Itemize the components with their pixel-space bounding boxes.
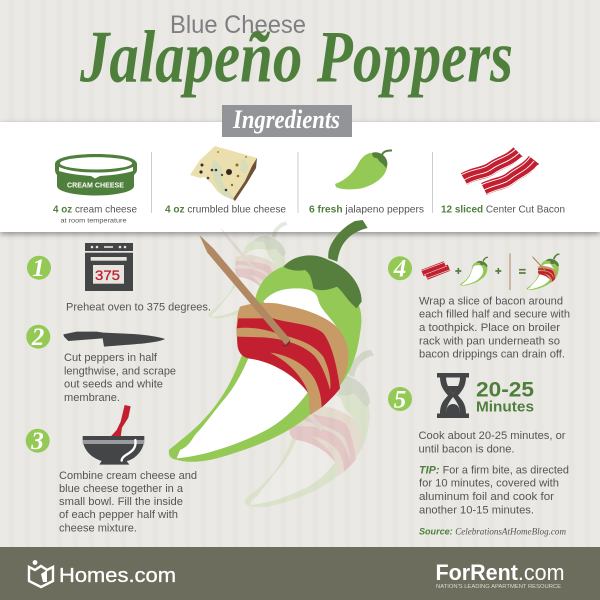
label: blue cheese amount: 4 oz crumbled blue cheese bbox=[165, 204, 286, 216]
logo: ForRent.com: ForRent.com bbox=[436, 560, 565, 585]
icon: oven: 375 bbox=[95, 267, 120, 283]
text: tip: aluminum foil and cook for bbox=[419, 491, 554, 503]
step number 1 bbox=[27, 255, 51, 282]
text: tip: for 10 minutes, covered with bbox=[419, 478, 559, 490]
text: combine: small bowl. Fill the inside bbox=[59, 496, 183, 508]
panel: ingredients background bbox=[0, 122, 600, 232]
text: cut peppers: membrane. bbox=[64, 392, 120, 404]
step number 2 bbox=[26, 324, 50, 351]
text: combine bbox=[59, 470, 197, 534]
footer bar bbox=[0, 547, 600, 600]
label: cream cheese amount: 4 oz cream cheese bbox=[53, 204, 137, 216]
step 5 bbox=[388, 373, 569, 537]
icon: mixing bowl with spatula bbox=[83, 405, 144, 465]
text: wrap: rack with pan underneath so bbox=[419, 335, 560, 347]
ingredient: blue cheese bbox=[165, 146, 286, 216]
icon: cream cheese tub: CREAM CHEESE bbox=[67, 180, 124, 190]
text: cut peppers: Cut peppers in half bbox=[64, 352, 158, 364]
ghost pepper: bottom bbox=[245, 350, 374, 507]
illustration: bacon-wrapped jalapeno with ghost peppers bbox=[169, 220, 374, 507]
text: cook: until bacon is done. bbox=[418, 443, 514, 455]
ghost pepper: top bbox=[208, 222, 288, 318]
text: wrap: Wrap a slice of bacon around bbox=[419, 295, 563, 307]
step number 5: 5 bbox=[394, 386, 406, 414]
icon: bacon strips bbox=[461, 149, 538, 194]
step 1 bbox=[27, 243, 211, 314]
note: at room temperature: at room temperature bbox=[60, 218, 127, 224]
icon: hourglass bbox=[437, 373, 469, 418]
text: time 20-25 minutes: Minutes bbox=[476, 399, 534, 416]
text: wrap: bacon drippings can drain off. bbox=[419, 348, 565, 360]
ingredient: jalapeno peppers bbox=[309, 150, 424, 216]
step number 1: 1 bbox=[32, 255, 45, 282]
divider bbox=[432, 152, 433, 213]
text: combine: of each pepper half with bbox=[59, 509, 178, 521]
logo: Homes.com: Homes.com bbox=[59, 565, 176, 587]
step number 3 bbox=[26, 428, 50, 455]
step number 3: 3 bbox=[30, 428, 44, 455]
text: combine: cheese mixture. bbox=[59, 522, 137, 534]
icon: jalapeno pepper bbox=[335, 150, 392, 189]
text: cut peppers: lengthwise, and scrape bbox=[64, 366, 176, 378]
step number 5 bbox=[388, 386, 412, 414]
text: combine: blue cheese together in a bbox=[59, 483, 184, 495]
text: cut peppers bbox=[64, 352, 176, 404]
icon: blue cheese wedge bbox=[190, 146, 257, 201]
logo: ForRent.com: NATION'S LEADING APARTMENT RESOURCE bbox=[436, 584, 561, 590]
main pepper bbox=[169, 220, 368, 462]
logo: Homes.com bbox=[29, 560, 176, 587]
label: peppers amount: 6 fresh jalapeno peppers bbox=[309, 204, 424, 216]
step number 4 bbox=[388, 256, 412, 282]
text: cook: Cook about 20-25 minutes, or bbox=[418, 430, 566, 442]
text: wrap: each filled half and secure with bbox=[419, 309, 570, 321]
text: time 20-25 minutes: 20-25 bbox=[476, 379, 534, 402]
icon: assembly equation bbox=[421, 253, 560, 290]
step number 2: 2 bbox=[31, 324, 44, 351]
step 2 bbox=[26, 324, 176, 404]
text: preheat: Preheat oven to 375 degrees. bbox=[66, 302, 211, 314]
divider bbox=[298, 152, 299, 213]
label: bacon amount: 12 sliced Center Cut Bacon bbox=[441, 204, 565, 216]
ingredient: bacon bbox=[441, 149, 565, 216]
text: cut peppers: out seeds and white bbox=[64, 378, 163, 390]
ingredient: cream cheese bbox=[53, 154, 137, 224]
icon: knife bbox=[63, 332, 165, 347]
step 4 bbox=[388, 253, 570, 360]
step 3 bbox=[26, 405, 197, 534]
text: tip: TIP: For a firm bite, as directed bbox=[419, 465, 569, 477]
text: wrap: a toothpick. Place on broiler bbox=[419, 322, 560, 334]
text: source: Source: CelebrationsAtHomeBlog.com bbox=[419, 526, 566, 537]
text: combine: Combine cream cheese and bbox=[59, 470, 197, 482]
text: tip: another 10-15 minutes. bbox=[419, 504, 534, 516]
text: wrap bbox=[419, 295, 570, 360]
text: cook bbox=[418, 430, 566, 455]
icon: oven bbox=[85, 243, 133, 291]
step number 4: 4 bbox=[393, 256, 406, 282]
divider bbox=[151, 152, 152, 213]
text: time 20-25 minutes bbox=[476, 379, 534, 416]
heading: Blue Cheese: Blue Cheese bbox=[170, 11, 306, 39]
text: tip bbox=[419, 465, 569, 516]
heading tag: Ingredients: Ingredients bbox=[232, 105, 340, 134]
